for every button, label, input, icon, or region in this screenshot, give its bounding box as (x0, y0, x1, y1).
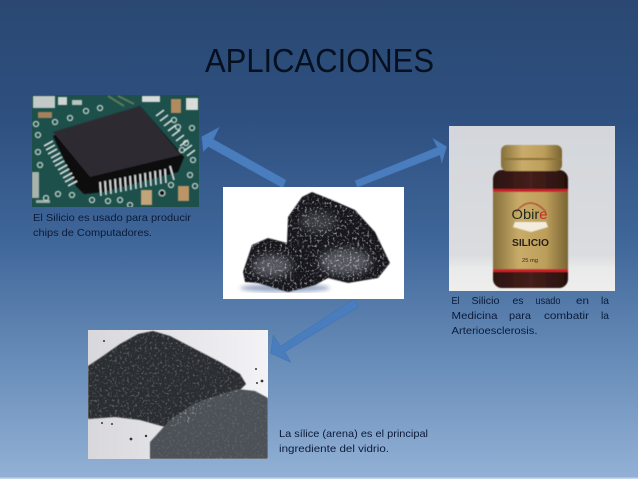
caption: medicine: Silicio (472, 295, 500, 307)
title: APLICACIONES (205, 43, 434, 80)
caption: medicine: usado (536, 295, 561, 307)
label emblem (516, 203, 546, 212)
photo: sand piles (88, 330, 268, 459)
caption: glass (279, 428, 428, 455)
caption: medicine: es (512, 295, 524, 307)
photo: microchip on circuit board (32, 95, 199, 208)
arrow: to chip (202, 127, 286, 188)
arrow: to bottle (355, 138, 447, 187)
arrow: to sand (271, 299, 359, 362)
caption: medicine: la (601, 310, 609, 322)
photo: supplement bottle (449, 126, 615, 291)
bottle body (493, 170, 568, 288)
chip package top (53, 106, 181, 177)
caption: medicine: en (576, 295, 589, 307)
photo: supplement bottle: SILICIO (512, 237, 549, 249)
caption: chips: El Silicio es usado para producir (33, 212, 192, 224)
caption: medicine: El (452, 295, 460, 307)
caption: medicine: para (509, 310, 531, 322)
photo: supplement bottle: Obire (512, 206, 548, 222)
chip pins (44, 110, 195, 196)
photo: silicon rock (223, 187, 404, 299)
chip package base (53, 106, 184, 194)
caption: medicine: Arterioesclerosis. (452, 325, 538, 337)
caption: chips: chips de Computadores. (33, 227, 152, 239)
caption: glass: ingrediente del vidrio. (279, 443, 389, 455)
photo: supplement bottle: 25 mg (522, 258, 538, 264)
caption: glass: La sílice (arena) es el principal (279, 428, 428, 440)
caption: medicine: combatir (544, 310, 590, 322)
caption: chips (33, 212, 192, 239)
caption: medicine: la (601, 295, 609, 307)
caption: medicine (452, 295, 609, 337)
label (493, 190, 568, 270)
caption: medicine: Medicina (452, 310, 498, 322)
gold cap (501, 145, 562, 171)
